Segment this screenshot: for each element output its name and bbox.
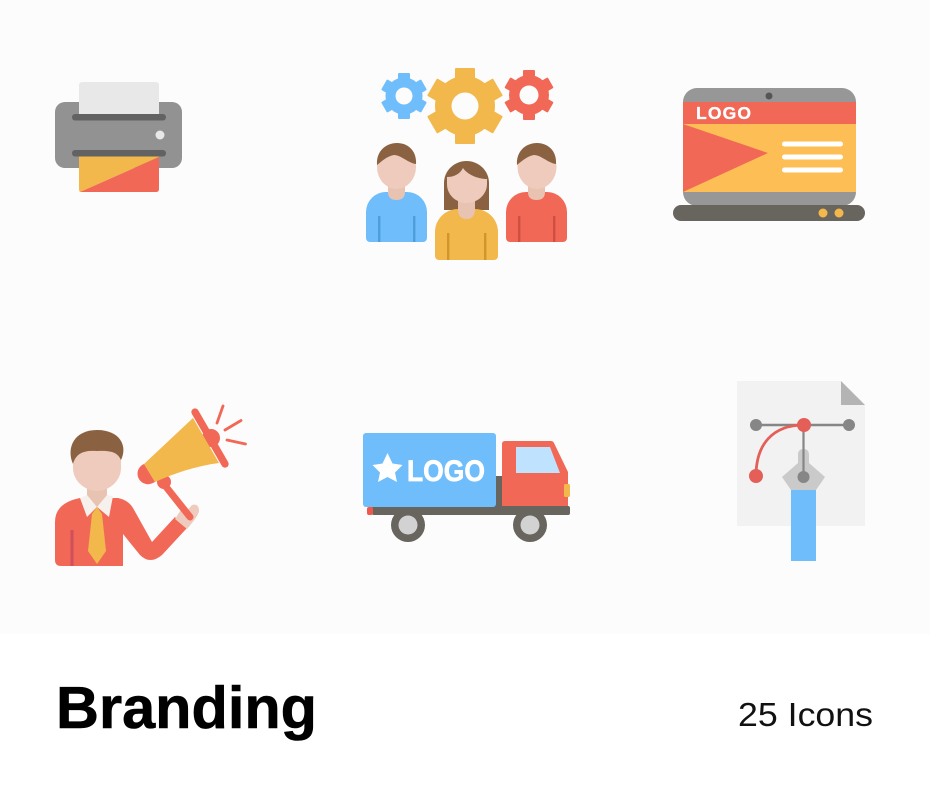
icon: team with gears	[366, 68, 567, 260]
hand	[175, 505, 199, 529]
title: Branding	[56, 675, 317, 741]
icon: man in red	[506, 143, 567, 242]
icon: yellow gear	[427, 68, 503, 144]
icon: woman in yellow	[435, 161, 498, 260]
face and hair	[73, 445, 121, 491]
shirt collar	[80, 495, 113, 517]
star	[372, 453, 402, 482]
icon: man in blue	[366, 143, 427, 242]
icon: blue gear	[381, 73, 427, 119]
icon: red gear	[504, 70, 554, 120]
icon: laptop with logo page	[673, 88, 865, 221]
logo label: LOGO	[407, 455, 485, 488]
icon count label: 25 Icons	[738, 697, 873, 734]
body and arm	[55, 498, 187, 566]
icon: man with megaphone	[55, 406, 246, 566]
icon: delivery truck with logo	[363, 433, 570, 542]
logo label: LOGO	[696, 103, 751, 123]
icon: vector pen tool on document	[737, 381, 865, 561]
icon: printer	[55, 82, 182, 192]
necktie	[88, 507, 106, 564]
megaphone	[138, 406, 246, 517]
